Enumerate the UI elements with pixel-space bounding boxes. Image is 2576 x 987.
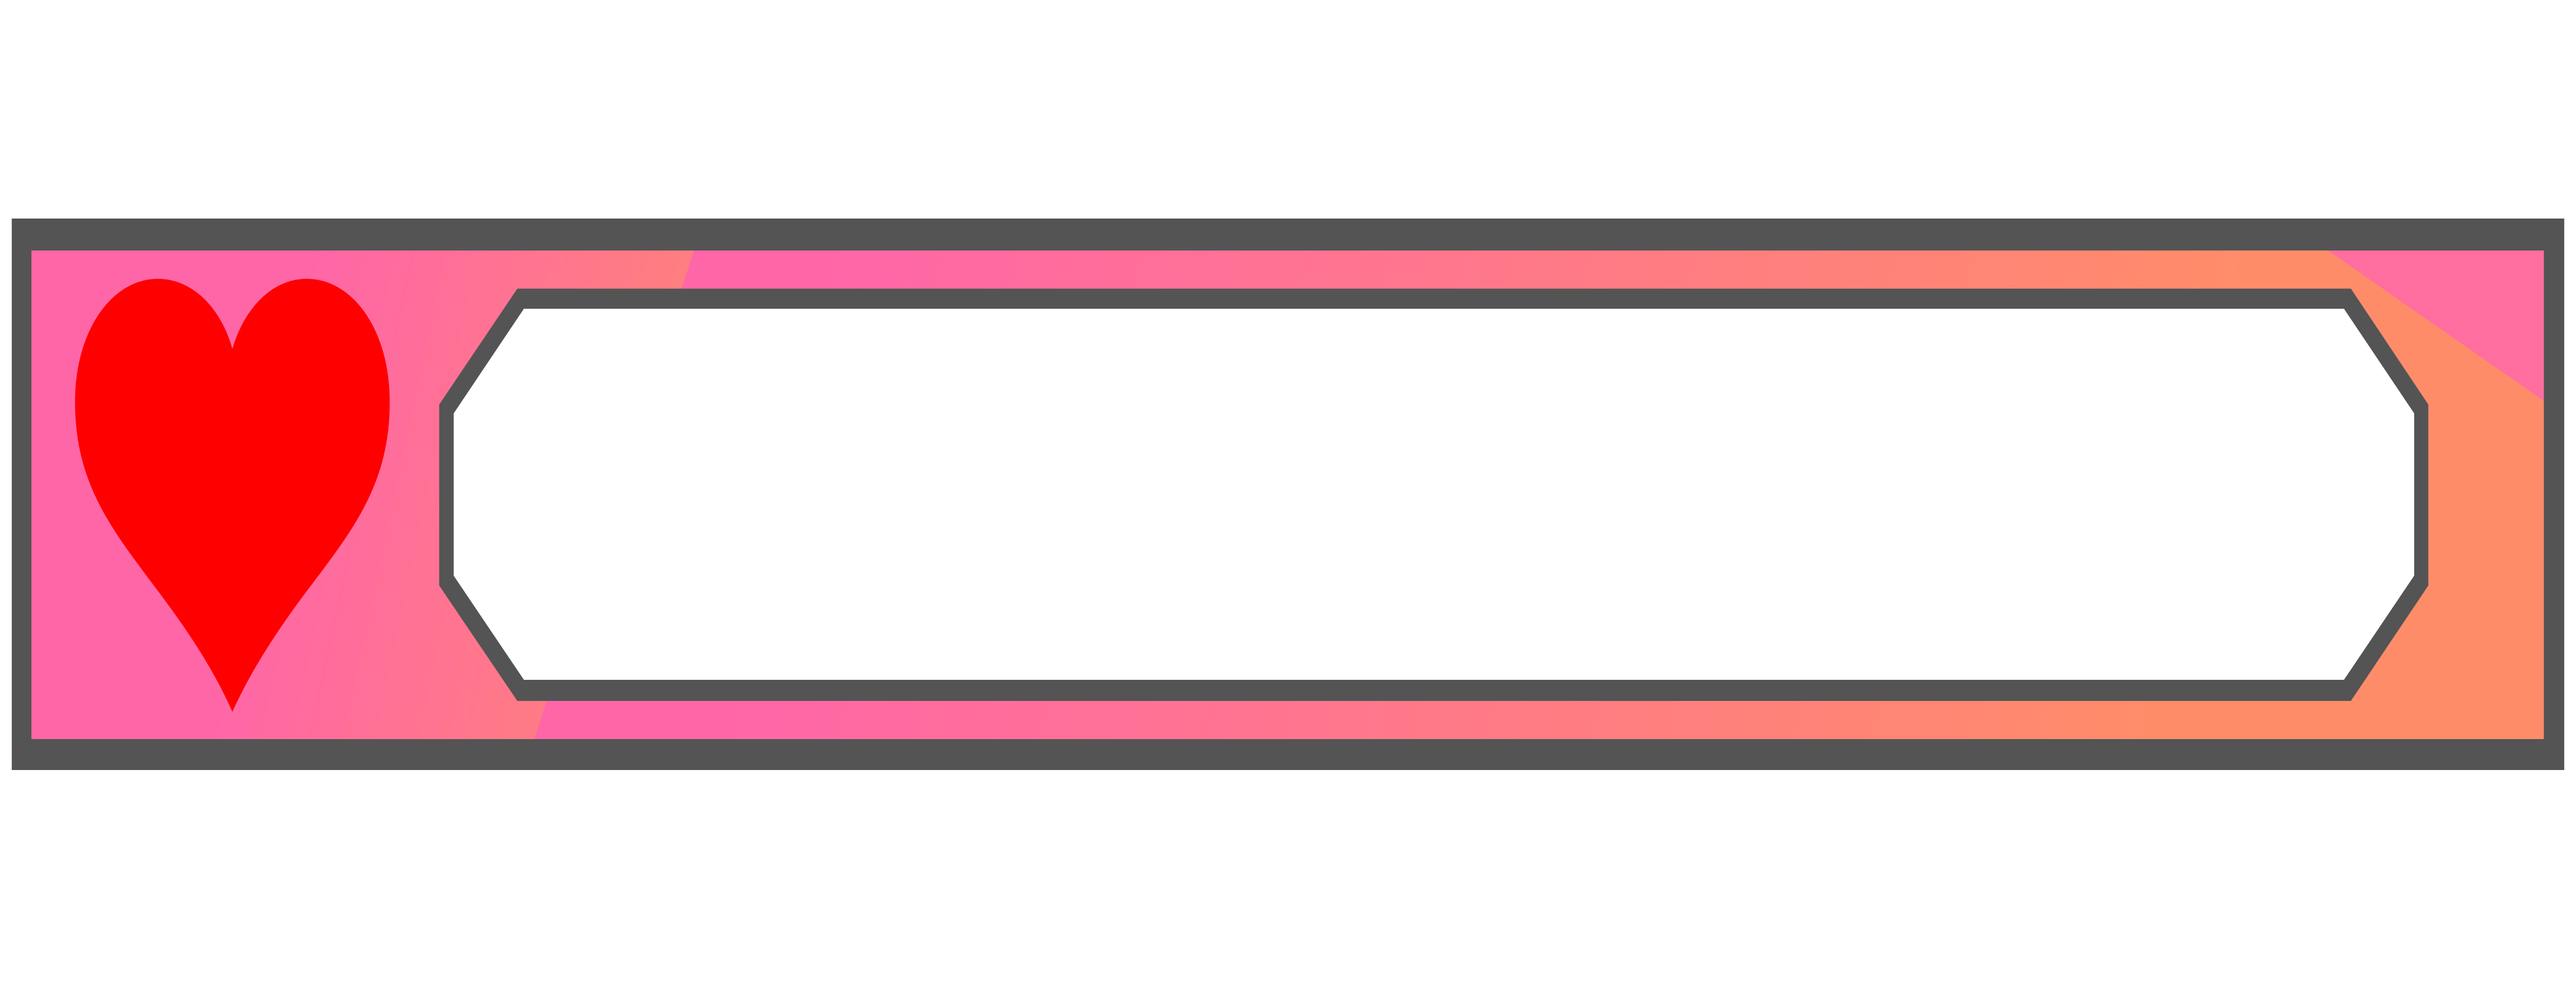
banner panel — [12, 219, 2564, 770]
left gradient wedge — [31, 250, 694, 739]
top right pink corner — [2328, 250, 2544, 401]
panel frame — [12, 219, 2564, 770]
octagonal label box — [439, 289, 2428, 701]
middle gradient background — [31, 250, 2544, 739]
icon: red heart — [75, 279, 389, 712]
